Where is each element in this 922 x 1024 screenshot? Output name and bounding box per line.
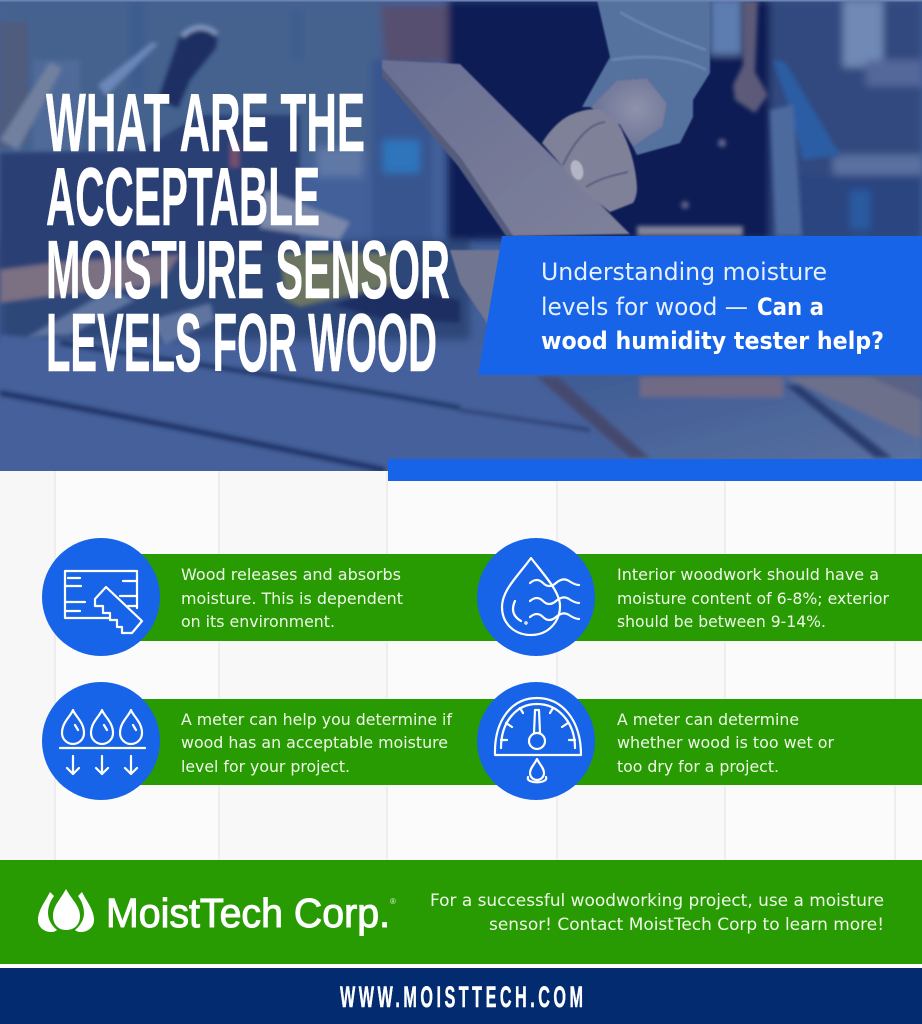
- title: WHAT ARE THE: [46, 76, 365, 169]
- text: wood has an acceptable moisture: [181, 733, 448, 752]
- text: A meter can help you determine if: [181, 710, 452, 729]
- text: whether wood is too wet or: [617, 733, 834, 752]
- item: interior and exterior moisture content: [477, 538, 889, 656]
- text: [617, 710, 834, 776]
- text: A meter can determine: [617, 710, 799, 729]
- text: should be between 9-14%.: [617, 612, 826, 631]
- green strip: row 1: [130, 554, 922, 641]
- distant planks right: [537, 377, 650, 458]
- text: moisture content of 6-8%; exterior: [617, 589, 889, 608]
- item: too wet or too dry: [477, 682, 834, 800]
- text: level for your project.: [181, 757, 350, 776]
- subtitle callout: wood humidity tester help?: [541, 327, 884, 355]
- item: wood releases and absorbs moisture: [42, 538, 403, 656]
- logo: MoistTech Corp: ®: [390, 897, 396, 906]
- footer green banner: [0, 860, 922, 964]
- title: [46, 76, 450, 389]
- hand: [542, 109, 637, 212]
- icon: gauge with drop: [495, 698, 581, 782]
- hero photo: carpenter holding a wood plank, blue tint: [0, 0, 922, 471]
- text: Wood releases and absorbs: [181, 565, 401, 584]
- footer call to action: sensor! Contact MoistTech Corp to learn more!: [489, 915, 884, 934]
- logo: MoistTech Corp: MoistTech Corp.: [106, 890, 390, 936]
- text: MOISTURE SENSOR: [46, 223, 450, 316]
- title: ACCEPTABLE: [46, 150, 320, 243]
- text: Interior woodwork should have a: [617, 565, 879, 584]
- website bar: [0, 968, 922, 1024]
- bench seams: [0, 393, 385, 470]
- text: on its environment.: [181, 612, 335, 631]
- footer call to action: For a successful woodworking project, use a moisture: [430, 891, 884, 910]
- text: [181, 710, 452, 776]
- sleeve: [582, 0, 710, 155]
- plank below callout: [450, 249, 500, 324]
- icon: three drops: [38, 889, 94, 932]
- website bar: WWW.MOISTTECH.COM: [340, 981, 583, 1014]
- text: too dry for a project.: [617, 757, 779, 776]
- footer call to action: [430, 891, 884, 934]
- text: moisture. This is dependent: [181, 589, 403, 608]
- wood plank background: [0, 471, 922, 860]
- subtitle callout: [478, 236, 922, 375]
- tool shapes left: [0, 22, 28, 150]
- workbench floor: [0, 334, 386, 470]
- main plank: [382, 60, 630, 236]
- icon: wood board with saw: [65, 571, 142, 633]
- subtitle callout: levels for wood —: [541, 293, 748, 321]
- icon: water drop with waves: [502, 558, 579, 635]
- apron strap and denim: [773, 60, 840, 160]
- item: meter determines acceptable level: [42, 682, 452, 800]
- blue accent bar: [388, 459, 922, 481]
- text: LEVELS FOR WOOD: [46, 296, 437, 389]
- text: [181, 565, 403, 631]
- text: [617, 565, 889, 631]
- icon: three drops over arrows: [60, 710, 145, 774]
- subtitle callout: Understanding moisture: [541, 258, 827, 286]
- forearm: [590, 78, 667, 147]
- subtitle callout: Can a: [757, 293, 824, 321]
- green strip: row 2: [130, 699, 922, 785]
